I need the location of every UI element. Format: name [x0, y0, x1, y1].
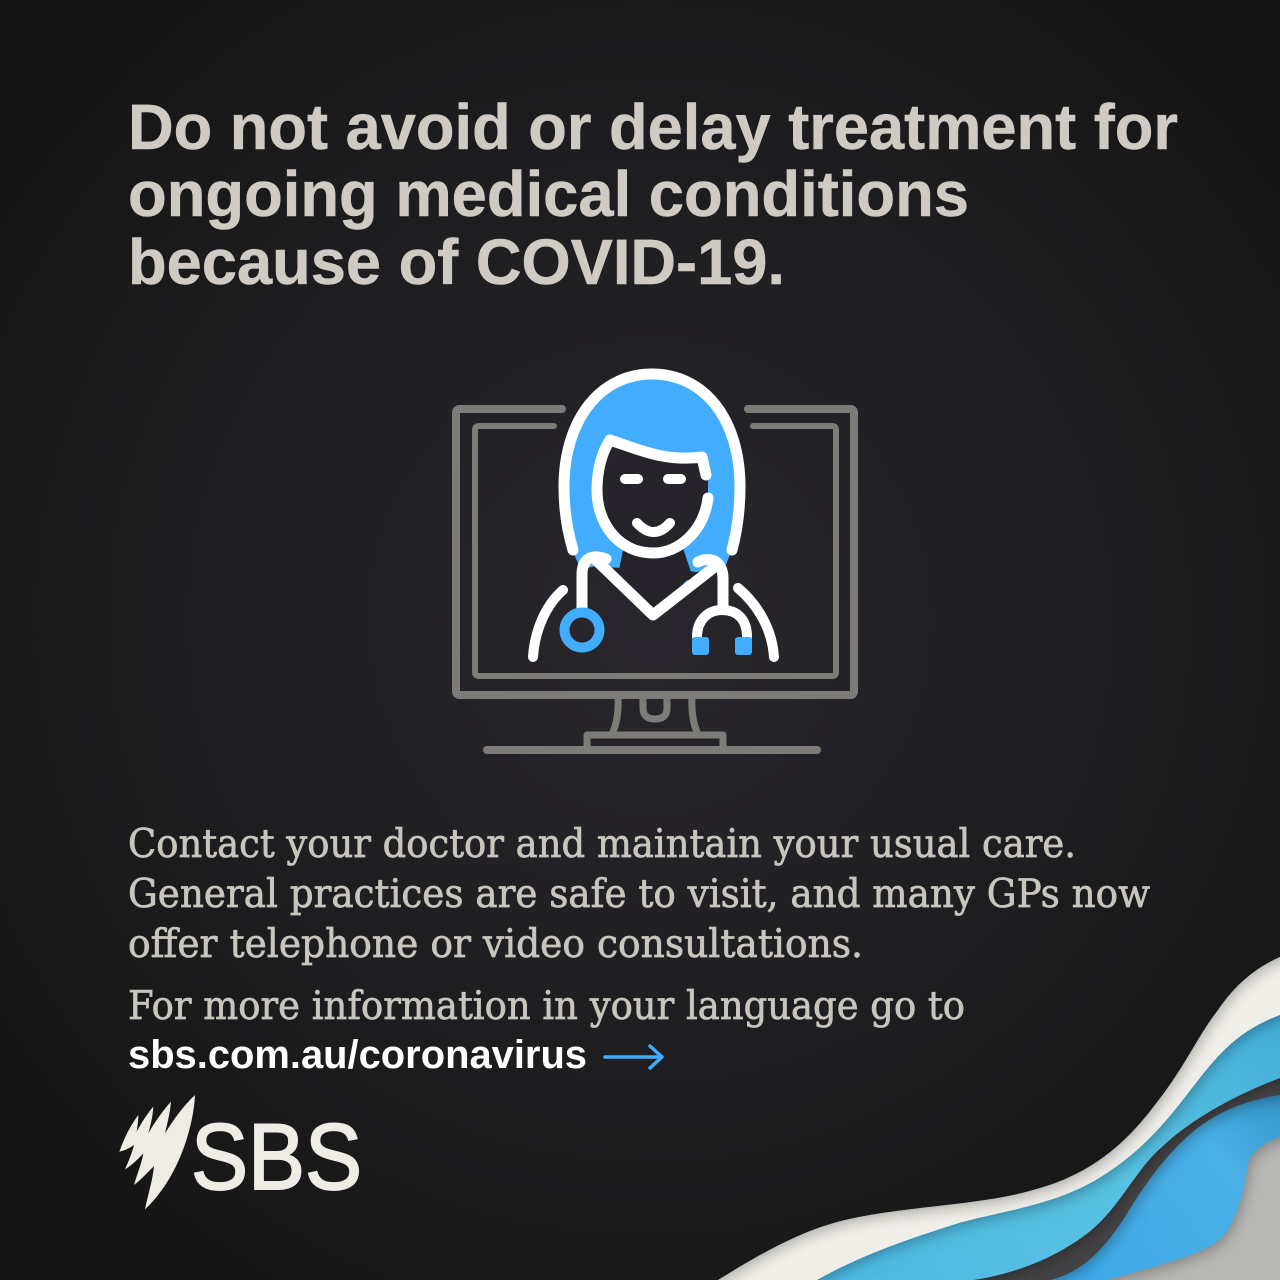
- icon: doctor on monitor: [456, 374, 854, 750]
- stethoscope: [582, 557, 606, 610]
- title: [128, 91, 1178, 298]
- wordmark: SBS: [191, 1104, 362, 1209]
- hair: [564, 374, 740, 590]
- doctor: [533, 374, 774, 657]
- eyes and smile: [625, 474, 681, 484]
- neck: [618, 545, 692, 612]
- hair outline: [564, 374, 740, 550]
- grey corner: [1000, 1120, 1280, 1280]
- arrow: [605, 1046, 662, 1068]
- monitor frame: [456, 409, 854, 750]
- face: [597, 440, 708, 553]
- blue wave: [960, 1090, 1280, 1280]
- dark wave: [900, 1060, 1280, 1280]
- body text: [128, 822, 1150, 967]
- language prompt: For more information in your language go to: [128, 984, 965, 1029]
- title: ongoing medical conditions: [128, 158, 969, 230]
- body text: Contact your doctor and maintain your usual care.: [128, 822, 1076, 867]
- logo mark: [119, 1095, 195, 1209]
- body text: General practices are safe to visit, and many GPs now: [128, 872, 1150, 917]
- light blue wave: [740, 995, 1280, 1280]
- SBS logo: [119, 1095, 362, 1209]
- scrubs and shoulders: [596, 560, 717, 615]
- decorative paper waves: [640, 930, 1280, 1280]
- title: Do not avoid or delay treatment for: [128, 91, 1178, 163]
- body text: offer telephone or video consultations.: [128, 922, 863, 967]
- website link: sbs.com.au/coronavirus: [128, 1033, 587, 1077]
- title: because of COVID-19.: [128, 226, 785, 298]
- white wave: [640, 930, 1280, 1280]
